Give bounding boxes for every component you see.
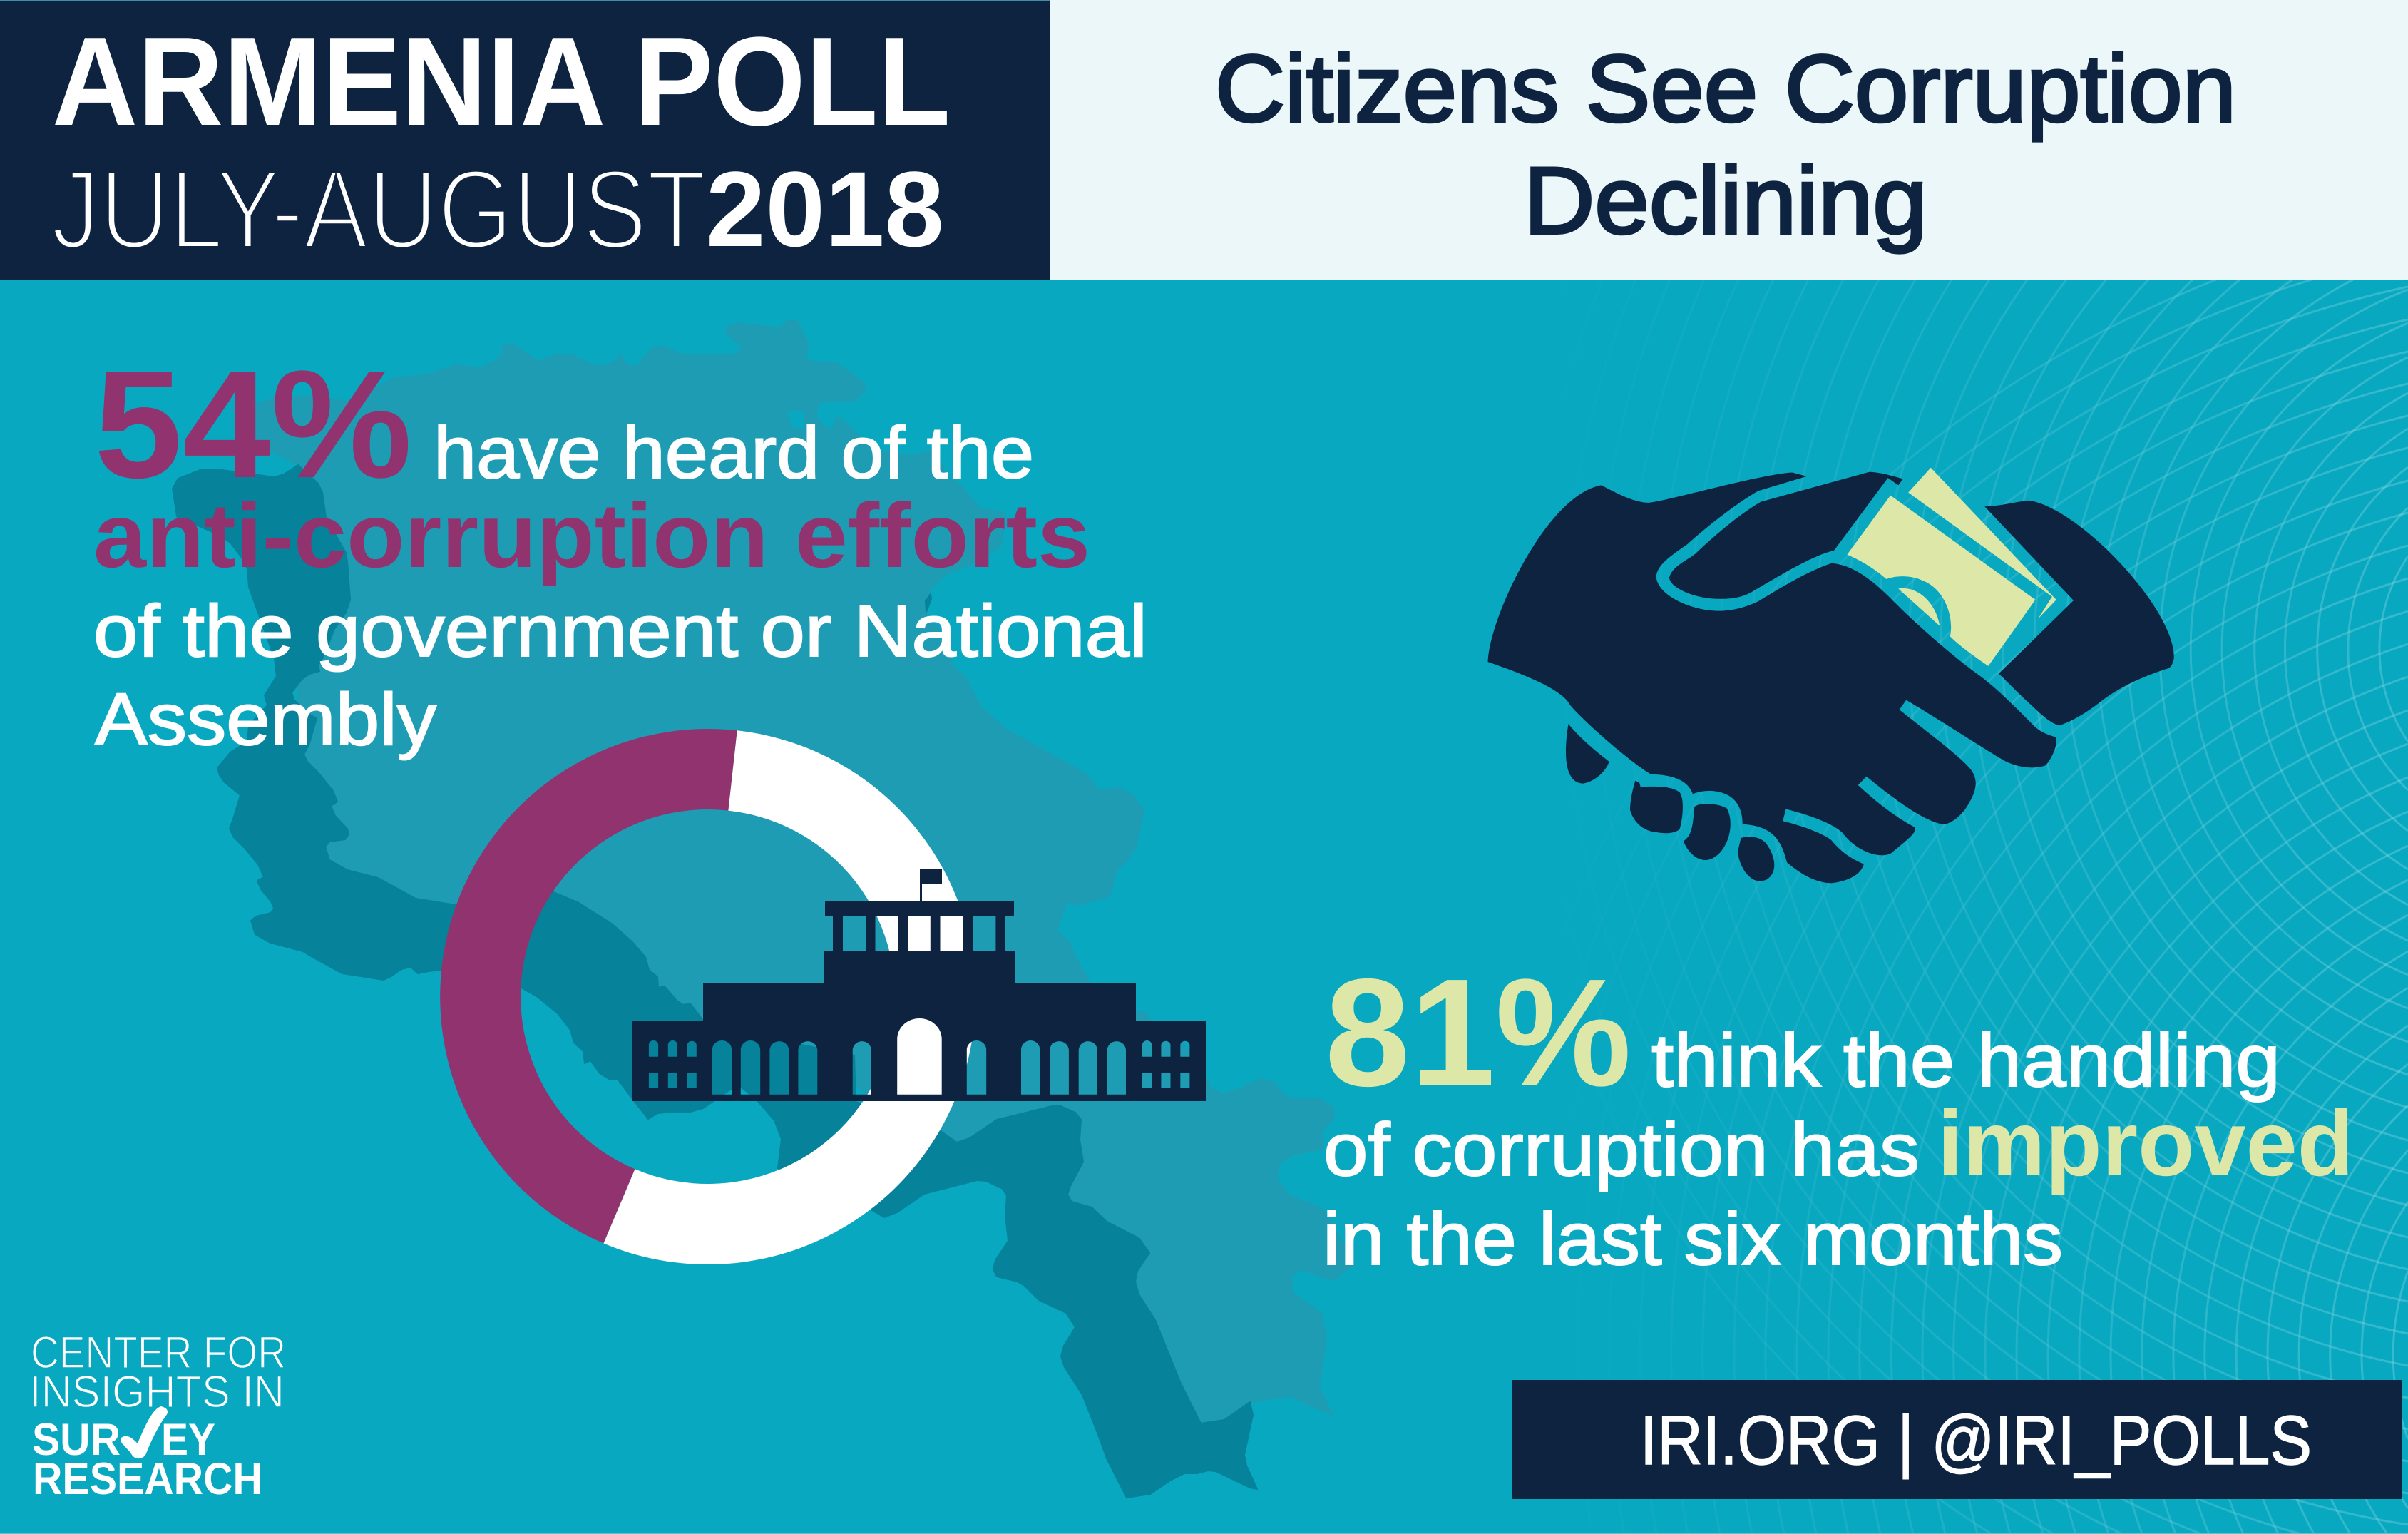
stat text: think the handling: think the handling [1651,1019,2280,1103]
logo: checkmark [121,1406,168,1458]
building: facade with windows [632,901,1206,1101]
headline line 1: Citizens See Corruption [1215,36,2236,142]
donut: white segment [603,730,975,1264]
title: Armenia Poll: ARMENIA POLL [52,11,951,152]
background wave pattern [1633,280,2408,1533]
donut: plum segment [440,729,737,1243]
logo: SUR: SUR [32,1415,121,1465]
header: headline panel [1050,0,2408,280]
logo: EY: EY [161,1415,215,1465]
logo: RESEARCH: RESEARCH [33,1454,262,1504]
subtitle: July-August: JULY-AUGUST [51,147,706,272]
handshake: finger two [1630,781,1683,833]
donut chart: 54 percent [440,729,975,1264]
logo: Center for Insights in Survey Research [29,1328,286,1504]
stat text: have heard of the: have heard of the [434,411,1034,494]
footer: social links box [1512,1380,2402,1499]
bottom edge line [0,1533,2408,1534]
handshake: finger three [1684,804,1731,860]
handshake: bill inner arc [1898,588,1940,626]
map: light region [253,321,1355,1430]
handshake: finger one [1566,724,1609,784]
handshake: front bill [1847,496,2035,666]
logo: line 2: INSIGHTS IN [29,1367,285,1417]
handshake: right arm [1984,501,2174,725]
subtitle: year: 2018 [706,149,944,269]
stat text: Assembly: Assembly [95,678,437,760]
stat number: 54%: 54% [94,338,412,510]
headline line 2: Declining [1524,148,1927,254]
handshake: finger four [1738,837,1774,881]
icon: handshake with money [1488,468,2174,883]
stat text: government line: of the government or National [93,590,1147,672]
map of Armenia [173,321,1355,1498]
footer: links text: IRI.ORG | @IRI_POLLS [1640,1401,2312,1479]
stat highlight: improved: improved [1937,1091,2354,1195]
stat text: of corruption has: of corruption has [1323,1108,1920,1192]
stat block: 54 percent [93,338,1147,760]
stat block: 81 percent [1323,946,2354,1281]
stat number: 81%: 81% [1325,946,1631,1118]
handshake: back bill [1908,468,2056,619]
map: dark region [173,465,1257,1498]
logo: line 1: CENTER FOR [31,1328,286,1378]
icon: parliament building [632,869,1206,1101]
building: flag [920,869,942,901]
handshake: left hand [1488,472,2056,883]
header: navy title panel [0,0,1050,280]
stat highlight: anti-corruption efforts: anti-corruption efforts [93,485,1090,587]
handshake: upper thumb [1669,472,1903,599]
top edge line [0,0,1050,1]
stat text: in the last six months: in the last six months [1323,1197,2063,1281]
